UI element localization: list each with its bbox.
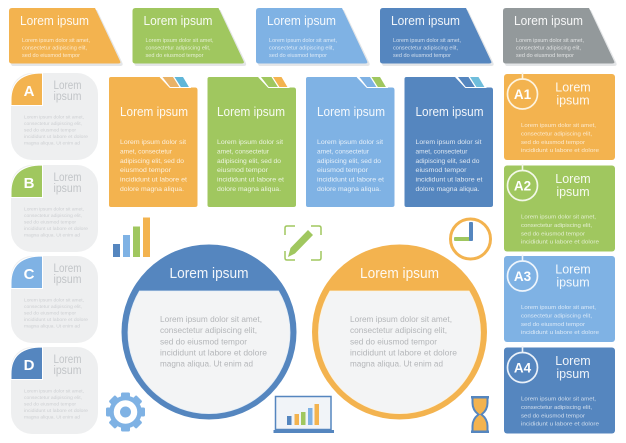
panel: card A: incididunt ut labore et dolore — [24, 134, 88, 139]
panel: card A3: Lorem ipsum dolor sit amet, — [521, 305, 596, 311]
panel: green trapezoid — [132, 8, 246, 66]
panel: orange folder card: amet, consectetur — [120, 148, 172, 156]
panel: card A: magna aliqua. Ut enim ad — [24, 140, 80, 146]
panel: card C: Lorem ipsum dolor sit amet, — [24, 298, 84, 302]
panel: card A4: consectetur adipiscing elit, — [521, 405, 592, 411]
panel: card B: magna aliqua. Ut enim ad — [24, 232, 80, 238]
panel: card C: sed do eiusmod tempor — [24, 310, 76, 316]
panel: orange trapezoid — [9, 8, 123, 66]
panel: light blue trapezoid: Lorem ipsum dolor sit amet, — [269, 38, 337, 44]
panel: green trapezoid: Lorem ipsum — [144, 13, 212, 28]
panel: card A1: A1 — [514, 87, 532, 102]
panel: card B: ipsum — [54, 183, 82, 195]
panel: card A3 — [504, 254, 615, 342]
panel: card A4: sed do eiusmod tempor — [521, 414, 585, 420]
panel: card D: ipsum — [54, 365, 82, 377]
panel: orange trapezoid: Lorem ipsum dolor sit amet, — [22, 38, 90, 44]
panel: card A3: Lorem — [555, 262, 591, 276]
panel: gray trapezoid: sed do eiusmod tempor — [516, 53, 574, 59]
panel: card D: incididunt ut labore et dolore — [24, 408, 88, 413]
panel: green folder card: incididunt ut labore et — [217, 176, 284, 184]
panel: card A3: consectetur adipiscing elit, — [521, 314, 592, 320]
panel: dark blue folder card — [404, 77, 493, 207]
panel: card A: consectetur adipiscing elit, — [24, 121, 82, 126]
panel: light blue trapezoid: Lorem ipsum — [267, 13, 336, 28]
panel: card A4: incididunt u labore et dolore — [521, 422, 599, 428]
panel: orange folder card: incididunt ut labore et — [120, 176, 187, 184]
panel: orange folder card: eiusmod tempor — [120, 167, 171, 174]
panel: dark blue trapezoid: sed do eiusmod tempor — [393, 53, 451, 59]
panel: card A2: sed do eiusmod tempor — [521, 232, 585, 238]
panel: light blue folder card: Lorem ipsum — [317, 104, 385, 119]
panel: green folder card — [208, 77, 296, 207]
panel: orange folder card: adipiscing elit, sed do — [120, 158, 185, 165]
panel: orange circle: incididunt ut labore et dolore — [350, 348, 457, 358]
panel: orange trapezoid: consectetur adipiscing elit, — [22, 46, 87, 52]
panel: light blue folder card: incididunt ut labore et — [317, 176, 384, 184]
panel: card C: ipsum — [54, 274, 82, 286]
panel: blue circle: Lorem ipsum dolor sit amet, — [160, 314, 262, 324]
panel: card A2: consectetur adipiscing elit, — [521, 223, 592, 229]
panel: card C: C — [24, 266, 35, 283]
panel: gray trapezoid: consectetur adipiscing elit, — [516, 46, 581, 52]
panel: gray trapezoid — [503, 8, 617, 66]
panel: card A4: A4 — [514, 360, 532, 376]
panel: card D: Lorem ipsum dolor sit amet, — [24, 388, 84, 394]
panel: light blue trapezoid: consectetur adipiscing elit, — [269, 46, 334, 52]
panel: light blue folder card: amet, consectetur — [317, 148, 369, 156]
panel: card A: ipsum — [54, 91, 82, 103]
panel: blue circle — [122, 244, 296, 420]
panel: dark blue folder card: Lorem ipsum — [416, 104, 484, 119]
panel: card B: B — [24, 175, 35, 192]
panel: dark blue trapezoid: Lorem ipsum — [391, 13, 460, 28]
panel: dark blue folder card: amet, consectetur — [416, 148, 468, 156]
panel: light blue folder card: adipiscing elit, sed do — [317, 158, 382, 165]
panel: dark blue folder card: dolore magna aliqua. — [416, 186, 480, 193]
panel: orange folder card: Lorem ipsum dolor sit — [120, 139, 186, 146]
panel: card A: Lorem — [54, 80, 82, 92]
panel: gray trapezoid: Lorem ipsum — [514, 13, 583, 28]
panel: green trapezoid: consectetur adipiscing elit, — [146, 46, 210, 52]
panel: card A: sed do eiusmod tempor — [24, 128, 76, 132]
icon: pencil in frame — [285, 226, 321, 260]
panel: card B: Lorem ipsum dolor sit amet, — [24, 206, 84, 212]
panel: green trapezoid: sed do eiusmod tempor — [146, 53, 204, 59]
panel: dark blue folder card: eiusmod tempor — [416, 167, 467, 174]
panel: card C: incididunt ut labore et dolore — [24, 317, 88, 322]
panel: light blue folder card — [306, 77, 394, 207]
panel: dark blue trapezoid — [380, 8, 494, 66]
panel: orange folder card: Lorem ipsum — [120, 104, 188, 119]
panel: orange circle: Lorem ipsum dolor sit amet, — [350, 314, 452, 324]
panel: card A4 — [504, 346, 615, 434]
panel: green folder card: Lorem ipsum — [217, 104, 285, 119]
panel: dark blue folder card: Lorem ipsum dolor sit — [416, 139, 482, 146]
panel: light blue folder card: Lorem ipsum dolor sit — [317, 139, 383, 146]
panel: card D: sed do eiusmod tempor — [24, 402, 76, 406]
panel: gray trapezoid: Lorem ipsum dolor sit amet, — [516, 38, 584, 44]
panel: orange circle: consectetur adipiscing elit, — [350, 325, 447, 335]
panel: orange folder card — [109, 77, 198, 207]
panel: card D: D — [24, 357, 35, 374]
icon: laptop with chart — [274, 396, 334, 433]
panel: orange circle: sed do eiusmod tempor — [350, 336, 437, 346]
panel: dark blue folder card: incididunt ut labore et — [416, 176, 483, 184]
panel: light blue folder card: eiusmod tempor — [317, 167, 368, 174]
panel: card A3: sed do eiusmod tempor — [521, 322, 585, 328]
panel: card A1: Lorem ipsum dolor sit amet, — [521, 123, 596, 129]
panel: green trapezoid: Lorem ipsum dolor sit amet, — [146, 38, 214, 44]
panel: dark blue trapezoid: consectetur adipiscing elit, — [393, 46, 458, 52]
panel: card A1: Lorem — [555, 80, 591, 94]
panel: card A4: Lorem ipsum dolor sit amet, — [521, 396, 596, 402]
panel: card A1 — [504, 72, 615, 160]
panel: blue circle: consectetur adipiscing elit, — [160, 325, 257, 335]
panel: card A1: consectetur adipiscing elit, — [521, 132, 592, 138]
panel: card B: Lorem — [54, 172, 82, 184]
panel: orange circle: Lorem ipsum — [360, 265, 439, 282]
panel: green folder card: eiusmod tempor — [217, 167, 268, 174]
panel: light blue folder card: dolore magna aliqua. — [317, 186, 381, 193]
panel: blue circle: incididunt ut labore et dolore — [160, 348, 267, 358]
panel: green folder card: amet, consectetur — [217, 148, 269, 156]
panel: green folder card: dolore magna aliqua. — [217, 186, 281, 193]
panel: card A3: A3 — [514, 269, 532, 284]
panel: blue circle: magna aliqua. Ut enim ad — [160, 358, 253, 368]
icon: bar chart — [113, 218, 150, 257]
panel: card B: incididunt ut labore et dolore — [24, 226, 88, 231]
panel: card D — [11, 347, 98, 434]
panel: card A: A — [24, 83, 35, 100]
panel: card C: magna aliqua. Ut enim ad — [24, 324, 80, 328]
panel: dark blue trapezoid: Lorem ipsum dolor sit amet, — [393, 38, 461, 44]
panel: green folder card: adipiscing elit, sed do — [217, 158, 282, 165]
panel: card D: consectetur adipiscing elit, — [24, 395, 82, 400]
panel: card D: Lorem — [54, 354, 82, 366]
panel: card A2: A2 — [514, 178, 531, 194]
panel: card A1: sed do eiusmod tempor — [521, 140, 585, 146]
panel: card D: magna aliqua. Ut enim ad — [24, 414, 80, 420]
panel: card A1: ipsum — [556, 94, 590, 108]
panel: card A4: ipsum — [556, 367, 590, 381]
panel: card B: consectetur adipiscing elit, — [24, 213, 82, 218]
panel: dark blue folder card: adipiscing elit, sed do — [416, 158, 480, 165]
panel: orange circle — [312, 244, 487, 420]
panel: orange trapezoid: sed do eiusmod tempor — [22, 53, 80, 59]
panel: green folder card: Lorem ipsum dolor sit — [217, 139, 283, 146]
icon: clock — [450, 219, 490, 259]
panel: blue circle: Lorem ipsum — [170, 265, 248, 282]
panel: card A4: Lorem — [555, 354, 591, 368]
panel: card A3: ipsum — [556, 276, 590, 290]
panel: light blue trapezoid: sed do eiusmod tempor — [269, 53, 327, 59]
panel: card A2: Lorem ipsum dolor sit amet, — [521, 214, 596, 220]
panel: card C — [11, 256, 98, 343]
icon: gear — [106, 392, 145, 432]
panel: blue circle: sed do eiusmod tempor — [160, 336, 247, 346]
panel: card A3: incididunt u labore et dolore — [521, 330, 599, 336]
panel: card A1: incididunt u labore et dolore — [521, 148, 599, 154]
panel: card A — [11, 73, 98, 160]
panel: card A2: Lorem — [555, 172, 591, 186]
panel: orange circle: magna aliqua. Ut enim ad — [350, 358, 443, 368]
panel: card A2 — [504, 164, 615, 252]
panel: light blue trapezoid — [256, 8, 370, 66]
panel: card A: Lorem ipsum dolor sit amet, — [24, 114, 84, 120]
icon: hourglass — [471, 396, 489, 433]
panel: card C: consectetur adipiscing elit, — [24, 304, 82, 309]
panel: card C: Lorem — [54, 263, 82, 275]
panel: orange trapezoid: Lorem ipsum — [20, 13, 89, 28]
panel: card A2: ipsum — [556, 185, 590, 199]
panel: orange folder card: dolore magna aliqua. — [120, 186, 184, 193]
panel: card B: sed do eiusmod tempor — [24, 220, 76, 224]
panel: card A2: incididunt u labore et dolore — [521, 240, 599, 246]
panel: card B — [11, 165, 98, 252]
